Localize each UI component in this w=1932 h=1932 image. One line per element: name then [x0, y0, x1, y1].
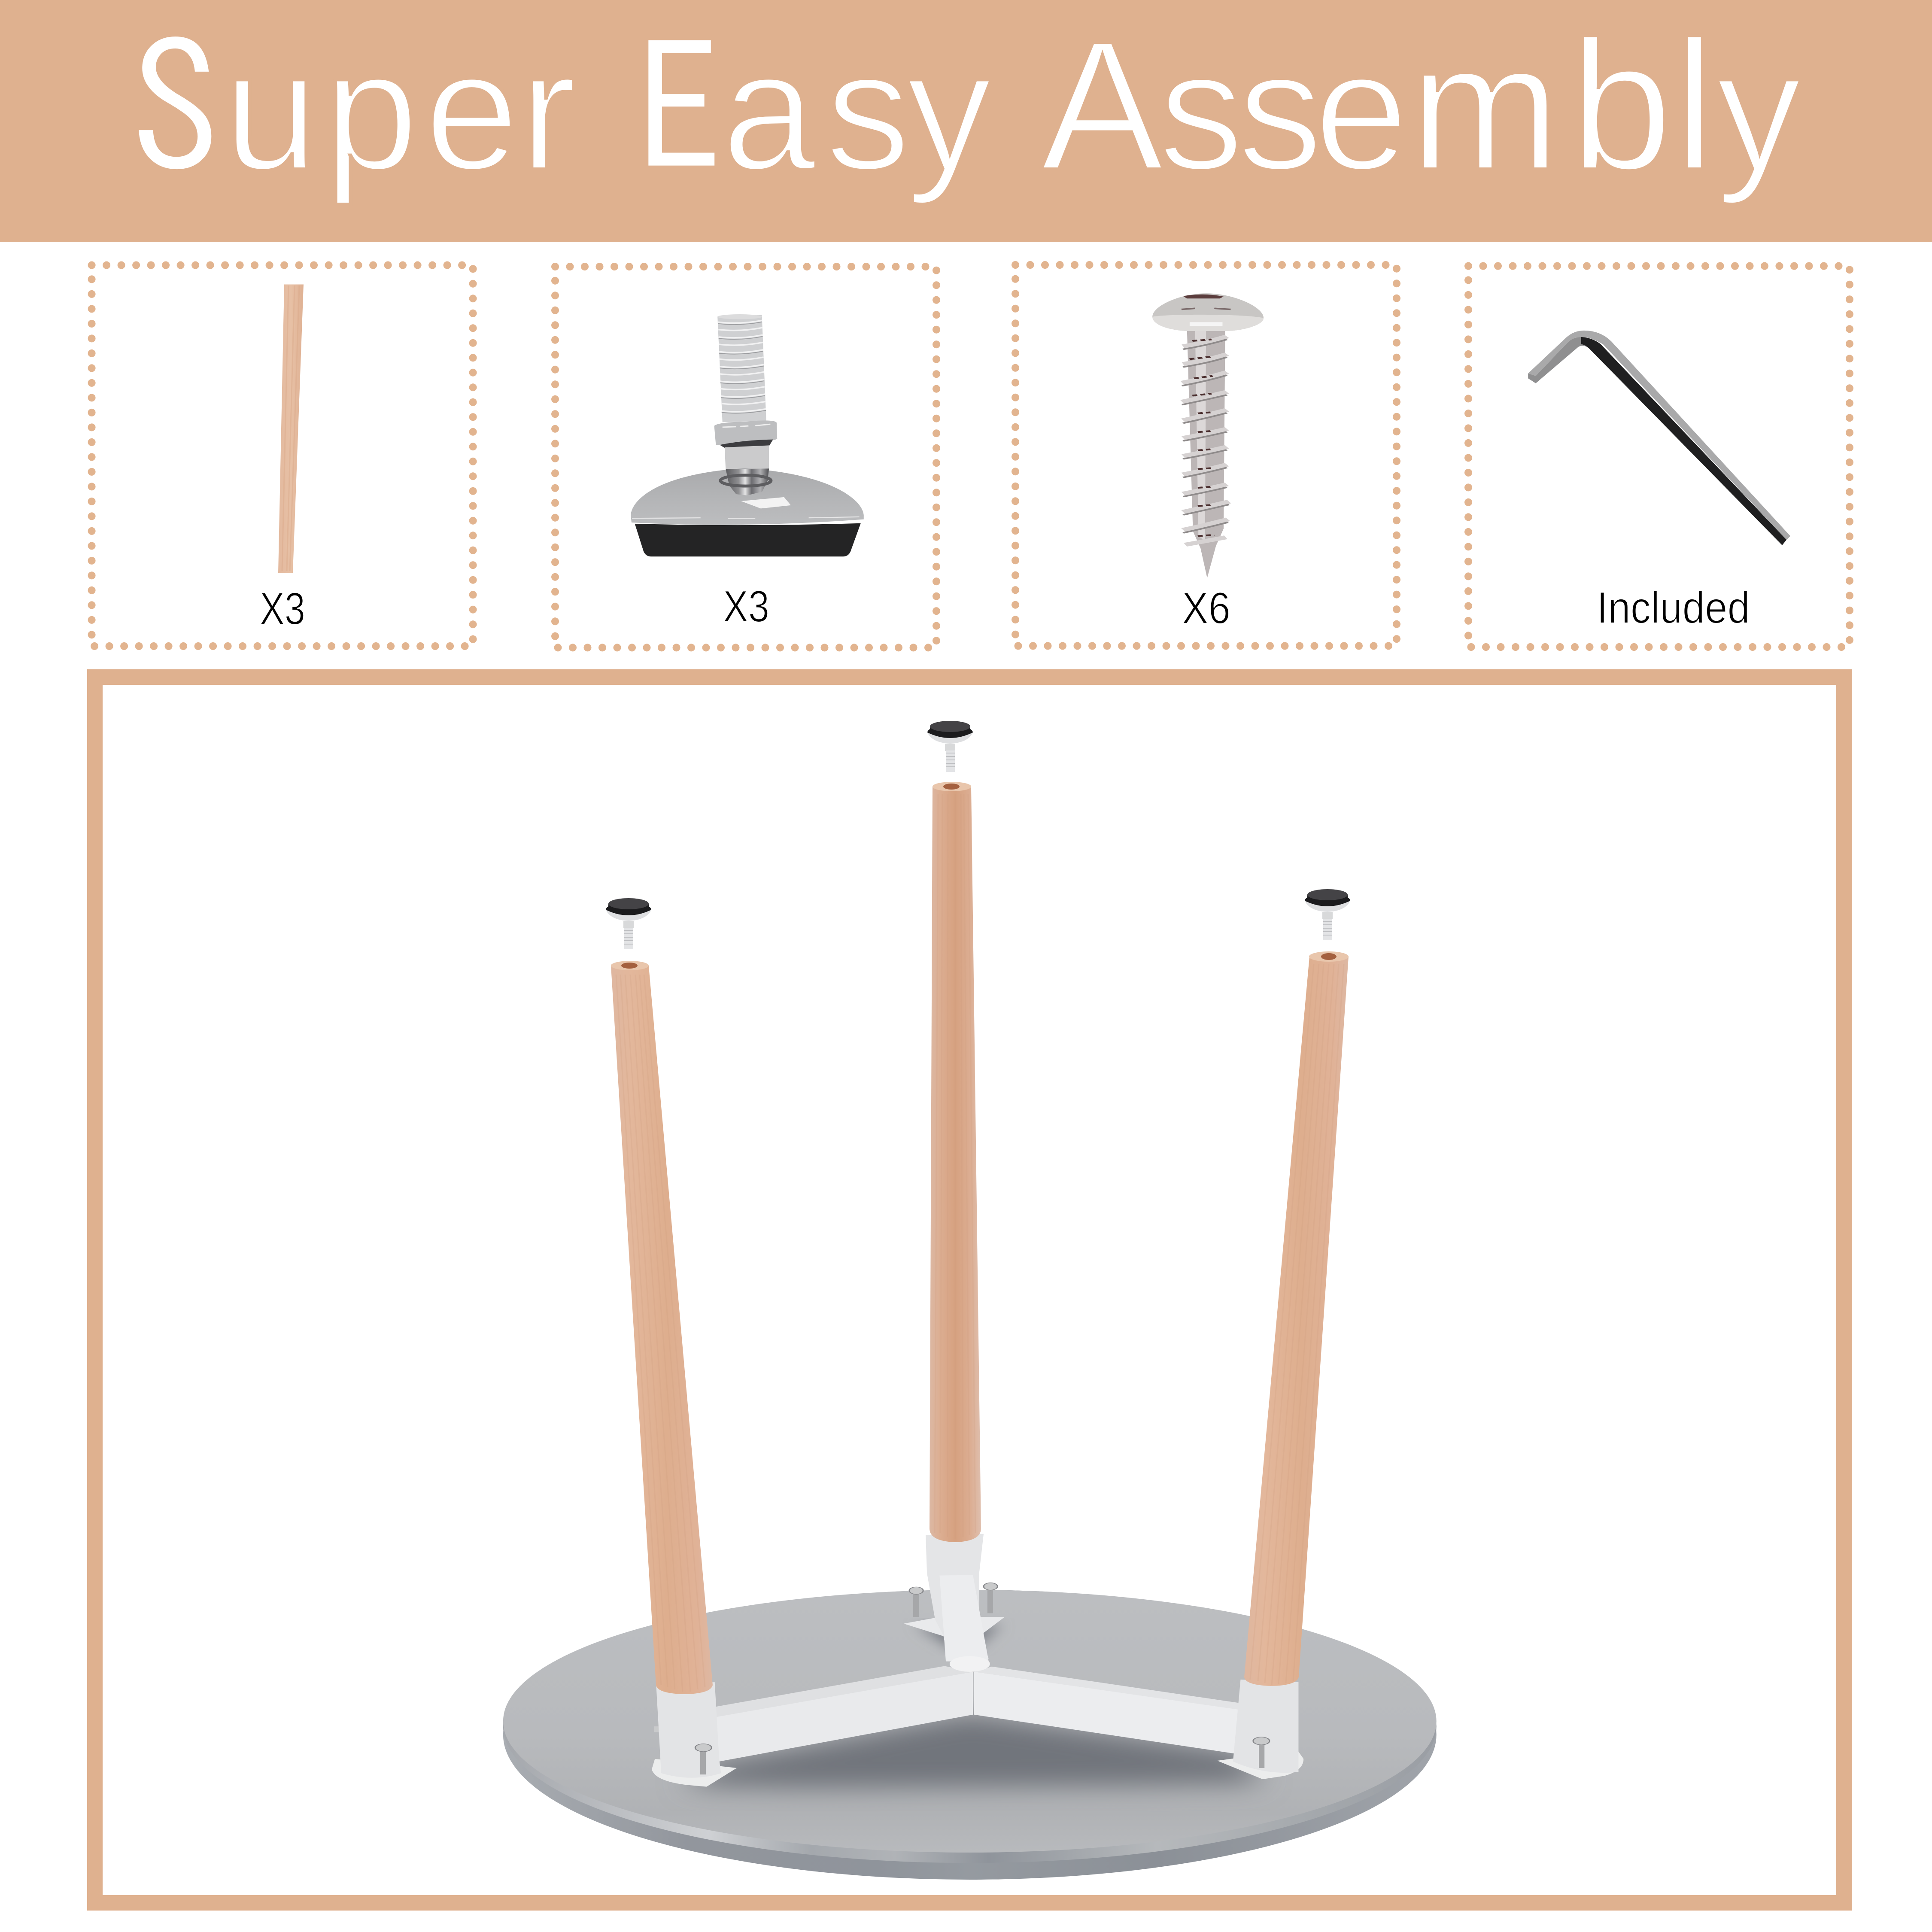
panel: screw part — [1015, 265, 1397, 646]
right arm — [974, 1667, 1239, 1754]
icon: hex key — [1528, 331, 1790, 545]
center cap — [950, 1656, 990, 1672]
back screws — [654, 1583, 997, 1732]
back sleeve and arm body — [926, 1534, 989, 1659]
dotted frame: screw — [1015, 265, 1397, 646]
right foot pad — [1305, 889, 1350, 940]
back foot pad — [927, 721, 973, 772]
label: foot quantity: X3 — [723, 582, 769, 632]
left foot plate — [652, 1759, 737, 1787]
panel: leveling foot part — [555, 267, 936, 647]
back mounting plate — [904, 1616, 1004, 1636]
front screws — [695, 1737, 1270, 1774]
back arm face — [939, 1575, 989, 1662]
dotted frame: legs — [92, 265, 473, 646]
icon: leveling foot — [631, 314, 864, 556]
dotted frame: hex key — [1468, 266, 1850, 647]
left wooden leg — [611, 961, 713, 1694]
table top — [503, 1590, 1437, 1880]
back wooden leg — [930, 782, 981, 1542]
illustration: upside-down table — [503, 721, 1437, 1880]
label: screw quantity: X6 — [1182, 583, 1230, 633]
label: hex key included: Included — [1597, 583, 1750, 633]
right foot plate — [1217, 1750, 1303, 1779]
title banner — [0, 0, 1932, 242]
label: leg quantity: X3 — [260, 583, 305, 634]
title: Super Easy Assembly — [130, 3, 1801, 209]
right sleeve — [1233, 1680, 1298, 1773]
metal bracket — [652, 1534, 1303, 1787]
right wooden leg — [1244, 951, 1349, 1686]
left sleeve — [656, 1682, 721, 1778]
icon: wooden leg — [278, 284, 304, 573]
icon: screw — [1152, 293, 1264, 578]
panel: assembled table frame — [95, 677, 1844, 1903]
dotted frame: foot — [555, 267, 936, 647]
left foot pad — [606, 898, 651, 949]
panel: hex key part — [1468, 266, 1850, 647]
left arm — [715, 1666, 973, 1762]
panel: table legs part — [92, 265, 473, 646]
